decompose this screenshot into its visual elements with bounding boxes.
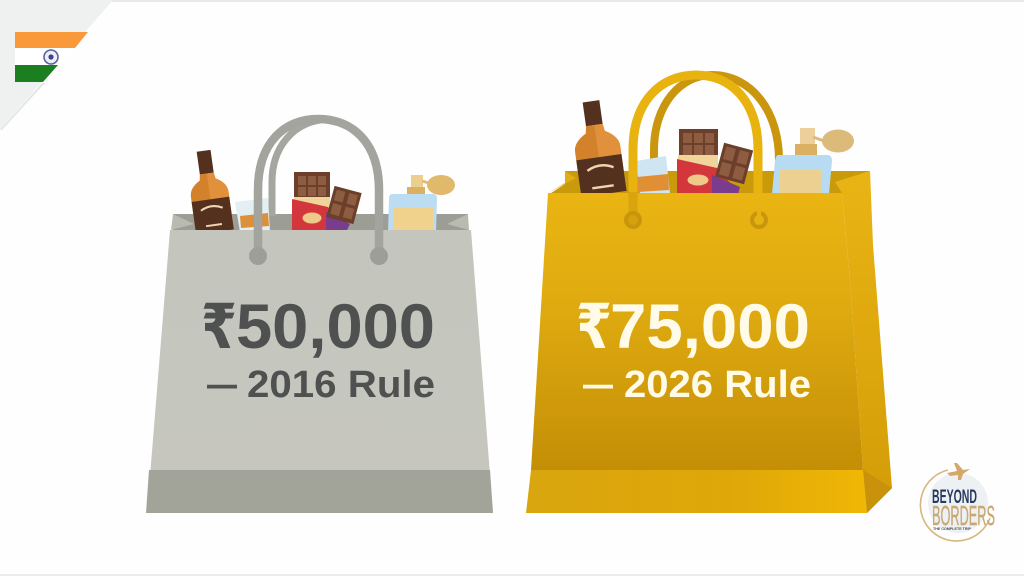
logo: Beyond Borders xyxy=(920,463,995,541)
grey bag front handle xyxy=(258,119,379,255)
gold bag side panel xyxy=(835,171,892,513)
gold bag: 2026 rule xyxy=(526,75,892,513)
grey bag bottle xyxy=(185,148,234,235)
gold bag bottom band xyxy=(526,470,867,513)
gold bag amount: 75,000 xyxy=(610,292,810,362)
corner ribbon with India flag xyxy=(0,0,113,130)
grey bag chocolate xyxy=(292,172,362,232)
gold bag rule label: — xyxy=(583,364,613,406)
gold bag left flap xyxy=(548,171,576,193)
gold bag back handle xyxy=(654,75,779,176)
grey bag whisky glass xyxy=(235,198,270,232)
icon: airplane xyxy=(947,463,970,480)
grey bag handle rivets xyxy=(249,247,388,265)
logo globe xyxy=(928,473,988,533)
gold bag amount: ₹ xyxy=(576,293,612,362)
gold bag back panel xyxy=(548,171,870,195)
logo ring xyxy=(920,470,990,541)
gold bag chocolate xyxy=(677,129,753,194)
gold bag whisky glass xyxy=(636,156,670,194)
gold bag rule label: 2026 Rule xyxy=(624,364,811,406)
grey bag back panel xyxy=(173,214,468,232)
grey bag back handle xyxy=(272,120,320,216)
grey bag rule label: — xyxy=(207,364,237,406)
icon: India flag xyxy=(15,32,88,82)
gold bag bottom fold xyxy=(863,470,892,513)
grey bag amount: ₹ xyxy=(201,293,237,362)
grey bag amount: 50,000 xyxy=(236,292,435,362)
gold bag front handle xyxy=(633,75,758,193)
gold bag bottle xyxy=(568,98,627,197)
grey bag: 2016 rule xyxy=(146,119,493,513)
grey bag flap corners xyxy=(171,214,469,230)
grey bag body xyxy=(147,230,493,513)
grey bag perfume xyxy=(388,175,455,232)
grey bag rule label: 2016 Rule xyxy=(247,364,435,406)
gold bag perfume xyxy=(772,128,854,194)
gold bag handle rings xyxy=(624,192,768,229)
logo word BEYOND: BEYOND xyxy=(932,487,977,508)
logo tagline: THE COMPLETE TRIP xyxy=(933,526,971,531)
grey bag bottom band xyxy=(146,470,493,513)
gold bag body xyxy=(531,193,863,470)
